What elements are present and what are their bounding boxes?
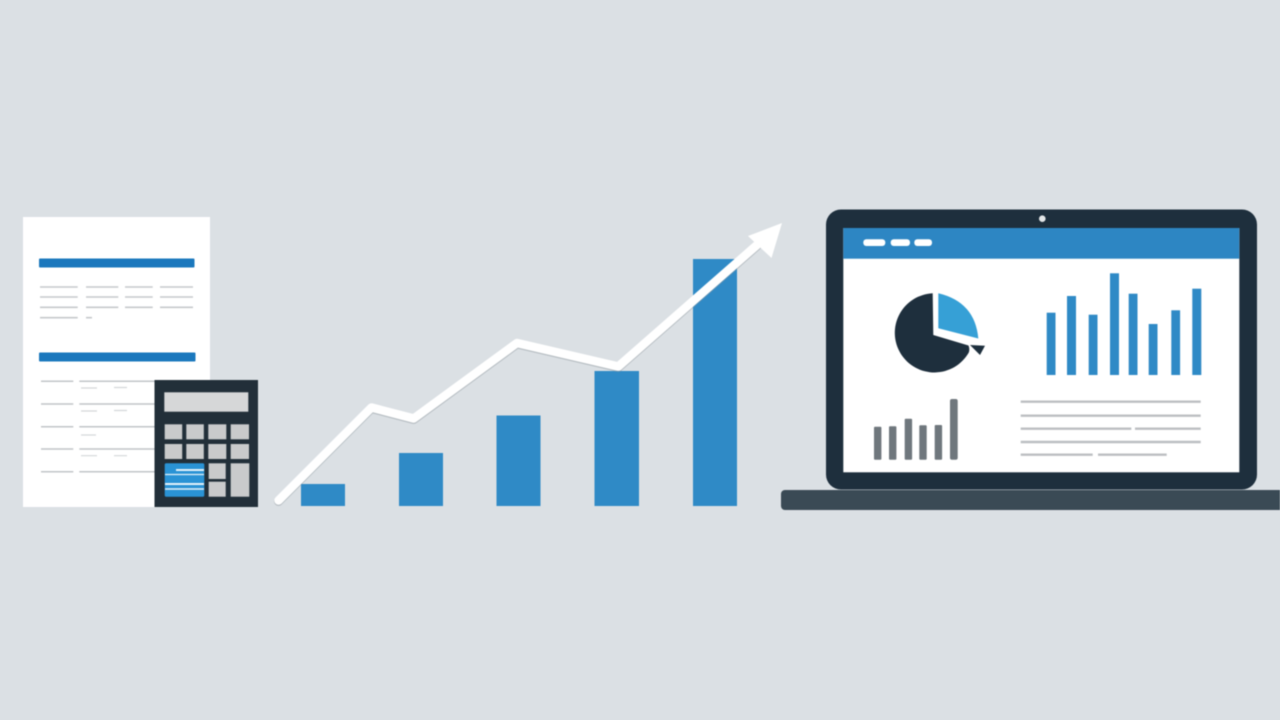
- bar chart: blue: [1047, 273, 1201, 375]
- chart: rising bars with arrow: [278, 223, 782, 506]
- text lines: [1021, 402, 1201, 455]
- bar chart: gray: [874, 399, 958, 460]
- text lines: first section: [40, 287, 193, 318]
- dashboard header: [843, 228, 1239, 259]
- pie slice: small wedge: [970, 345, 985, 355]
- calculator display: [164, 392, 248, 412]
- heading bar: first section: [39, 258, 194, 268]
- heading bar: second section: [39, 352, 196, 362]
- bar chart: [301, 259, 737, 506]
- arrow head: [748, 223, 782, 258]
- calculator keys: [165, 424, 249, 497]
- text lines: second section: [41, 381, 156, 472]
- laptop frame: [826, 210, 1257, 490]
- icon: calculator: [154, 380, 258, 507]
- arrow line: [278, 245, 757, 500]
- document with calculator: [23, 217, 258, 507]
- laptop with dashboard: [781, 210, 1280, 510]
- arrow: growth trend: [278, 223, 782, 502]
- webcam: [1039, 215, 1046, 222]
- header pills: [863, 239, 932, 246]
- pie chart: [895, 293, 985, 372]
- pie slice: blue: [938, 293, 978, 338]
- laptop base: [781, 490, 1280, 510]
- calculator blue key: [165, 463, 204, 497]
- panel: paper document: [23, 217, 210, 507]
- panel: dashboard screen: [843, 228, 1239, 472]
